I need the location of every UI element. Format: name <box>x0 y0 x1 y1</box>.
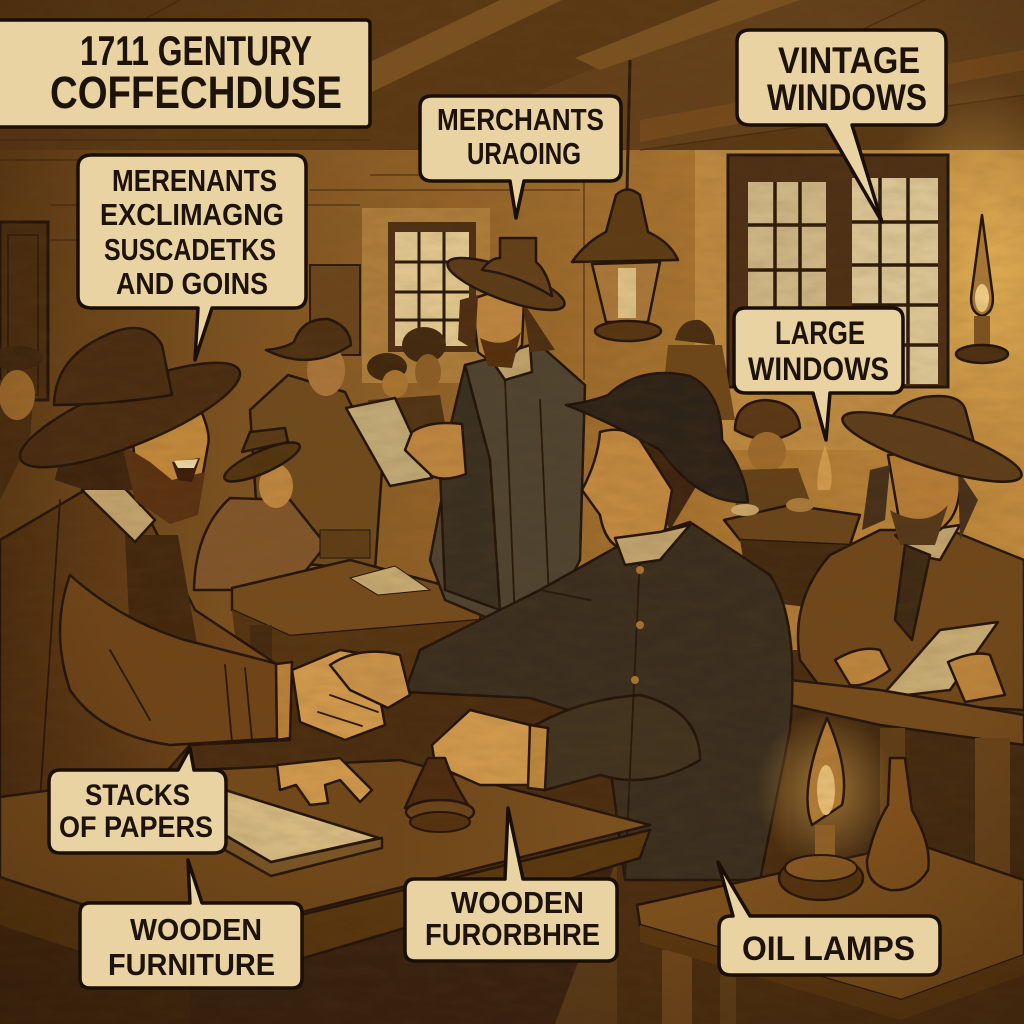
callout: merchants trading: MERCHANTS <box>437 102 604 137</box>
callout: merchants exchanging: AND GOINS <box>116 266 268 301</box>
table by large windows with cups and lamp <box>724 445 860 610</box>
callout: stacks of papers: OF PAPERS <box>59 811 213 844</box>
right seated merchant <box>798 396 1024 710</box>
callout: large windows <box>734 308 903 440</box>
callout: wooden furniture: FURNITURE <box>108 947 275 982</box>
small table at right <box>637 843 1024 1024</box>
callout: wooden furorbhre: WOODEN <box>451 885 584 920</box>
callout: merchants trading <box>420 96 621 218</box>
left merchant laughing <box>0 328 292 800</box>
standing merchant with menu <box>346 238 585 640</box>
inkwell on table <box>405 758 474 832</box>
vintage windows <box>728 155 948 387</box>
callout: large windows: LARGE <box>775 315 865 351</box>
title banner: COFFECHDUSE <box>50 67 342 118</box>
callout: wooden furniture: WOODEN <box>130 912 262 947</box>
callout: merchants trading: URAOING <box>467 136 581 171</box>
callout: wooden furniture <box>80 860 302 988</box>
centre merchant in dark coat <box>405 373 792 880</box>
callout: oil lamps <box>718 862 940 975</box>
bottle <box>867 758 929 890</box>
callout: vintage windows: WINDOWS <box>767 77 927 118</box>
callout: wooden furorbhre <box>405 808 617 961</box>
large window at back <box>388 222 476 352</box>
right table <box>790 680 1024 880</box>
callout: stacks of papers <box>49 748 226 853</box>
left hand and handshake <box>277 650 548 805</box>
callout: vintage windows <box>737 30 946 222</box>
callout: stacks of papers: STACKS <box>85 779 190 812</box>
back table <box>232 530 484 680</box>
callout: merchants exchanging: MERENANTS <box>112 163 277 198</box>
callout: oil lamps: OIL LAMPS <box>742 930 915 968</box>
callout: large windows: WINDOWS <box>748 351 889 387</box>
standing patron at centre-left <box>250 319 382 570</box>
oil lamp <box>756 710 896 900</box>
title banner <box>0 20 370 127</box>
callout: wooden furorbhre: FURORBHRE <box>425 917 600 952</box>
small seated patron <box>194 428 326 590</box>
callout: merchants exchanging: EXCLIMAGNG <box>100 197 284 232</box>
hanging lamp <box>572 60 678 341</box>
stack of papers <box>225 790 382 876</box>
callout: vintage windows: VINTAGE <box>778 40 920 81</box>
callout: merchants exchanging: SUSCADETKS <box>104 232 276 267</box>
background patrons <box>0 320 815 515</box>
title banner: 1711 GENTURY <box>80 27 312 74</box>
front table <box>0 760 650 1024</box>
wall candle <box>956 215 1008 363</box>
callout: merchants exchanging <box>78 155 306 360</box>
